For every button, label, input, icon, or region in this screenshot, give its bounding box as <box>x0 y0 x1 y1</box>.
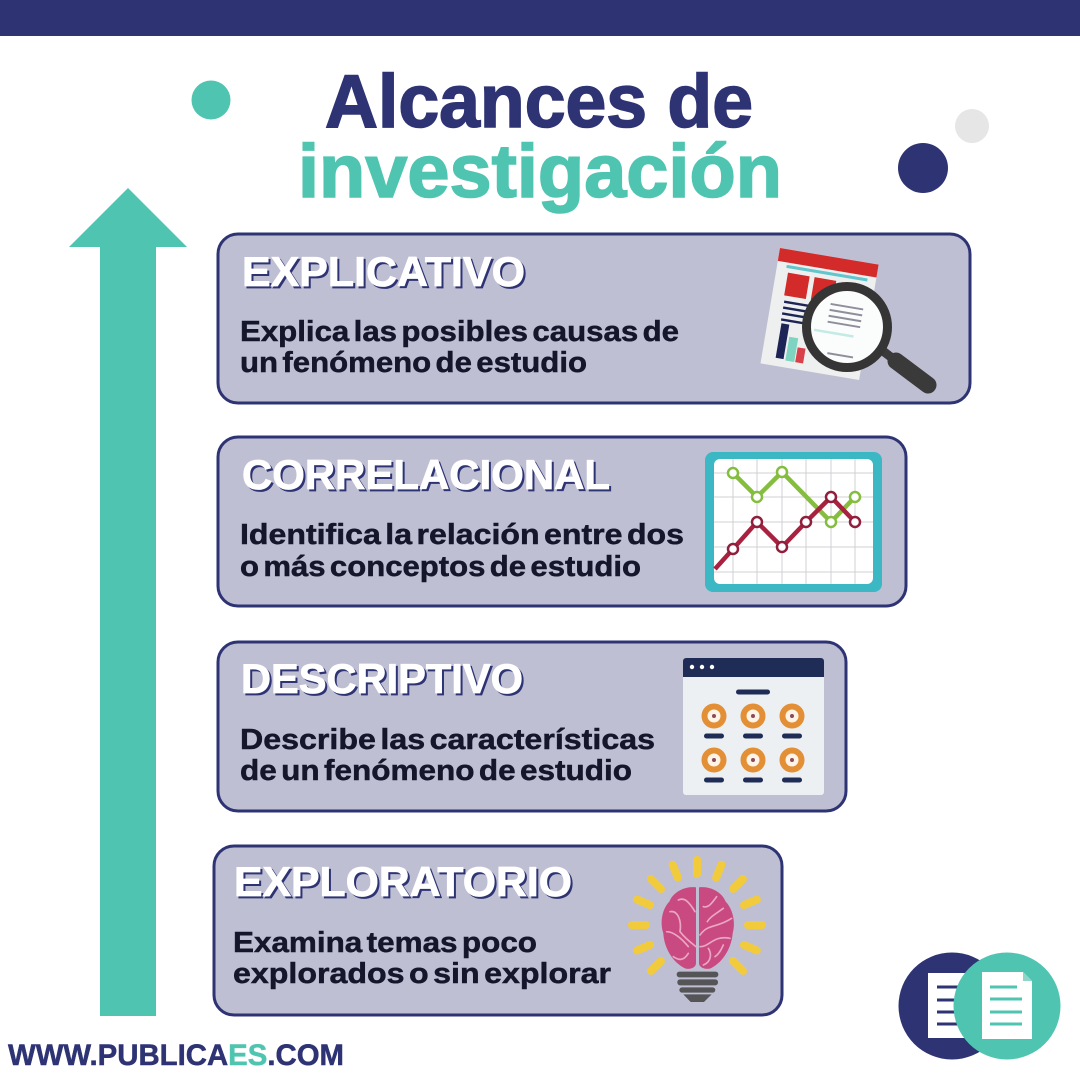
text: descriptivo description: de un fenómeno de estudio <box>240 755 632 787</box>
heading: exploratorio: EXPLORATORIO <box>234 858 572 905</box>
panel: correlacional <box>218 437 906 606</box>
panel: explicativo <box>218 234 970 403</box>
heading: correlacional: CORRELACIONAL <box>242 451 610 498</box>
panel: descriptivo <box>218 642 846 811</box>
title: investigación <box>298 129 782 213</box>
decorative grey dot <box>955 109 989 143</box>
text: correlacional description: o más conceptos de estudio <box>240 551 641 583</box>
heading: descriptivo: DESCRIPTIVO <box>241 655 523 702</box>
title <box>298 59 782 213</box>
icon: magnifying glass over report <box>760 248 928 385</box>
text: exploratorio description: Examina temas poco <box>233 927 537 959</box>
decorative navy dot <box>898 143 948 193</box>
text: explicativo description: Explica las posibles causas de <box>240 316 679 348</box>
text: exploratorio description <box>233 927 611 990</box>
text: explicativo description: un fenómeno de estudio <box>240 347 587 379</box>
text: descriptivo description <box>240 724 655 787</box>
icon: brain light bulb <box>632 860 762 1002</box>
icon: overlapping documents <box>898 952 1060 1060</box>
footer website: WWW.PUBLICAES.COM <box>8 1039 344 1072</box>
text: descriptivo description: Describe las características <box>240 724 655 756</box>
text: correlacional description: Identifica la relación entre dos <box>240 519 684 551</box>
top bar <box>0 0 1080 36</box>
heading: explicativo: EXPLICATIVO <box>242 248 525 295</box>
text: correlacional description <box>240 519 684 583</box>
icon: line chart <box>705 452 882 592</box>
icon: browser window grid <box>683 658 824 795</box>
panel: exploratorio <box>214 846 782 1015</box>
decorative teal dot <box>192 80 230 120</box>
text: exploratorio description: explorados o sin explorar <box>233 958 611 990</box>
arrow: upward progression <box>69 188 187 1016</box>
title: Alcances de <box>325 59 753 143</box>
text: explicativo description <box>240 316 679 379</box>
